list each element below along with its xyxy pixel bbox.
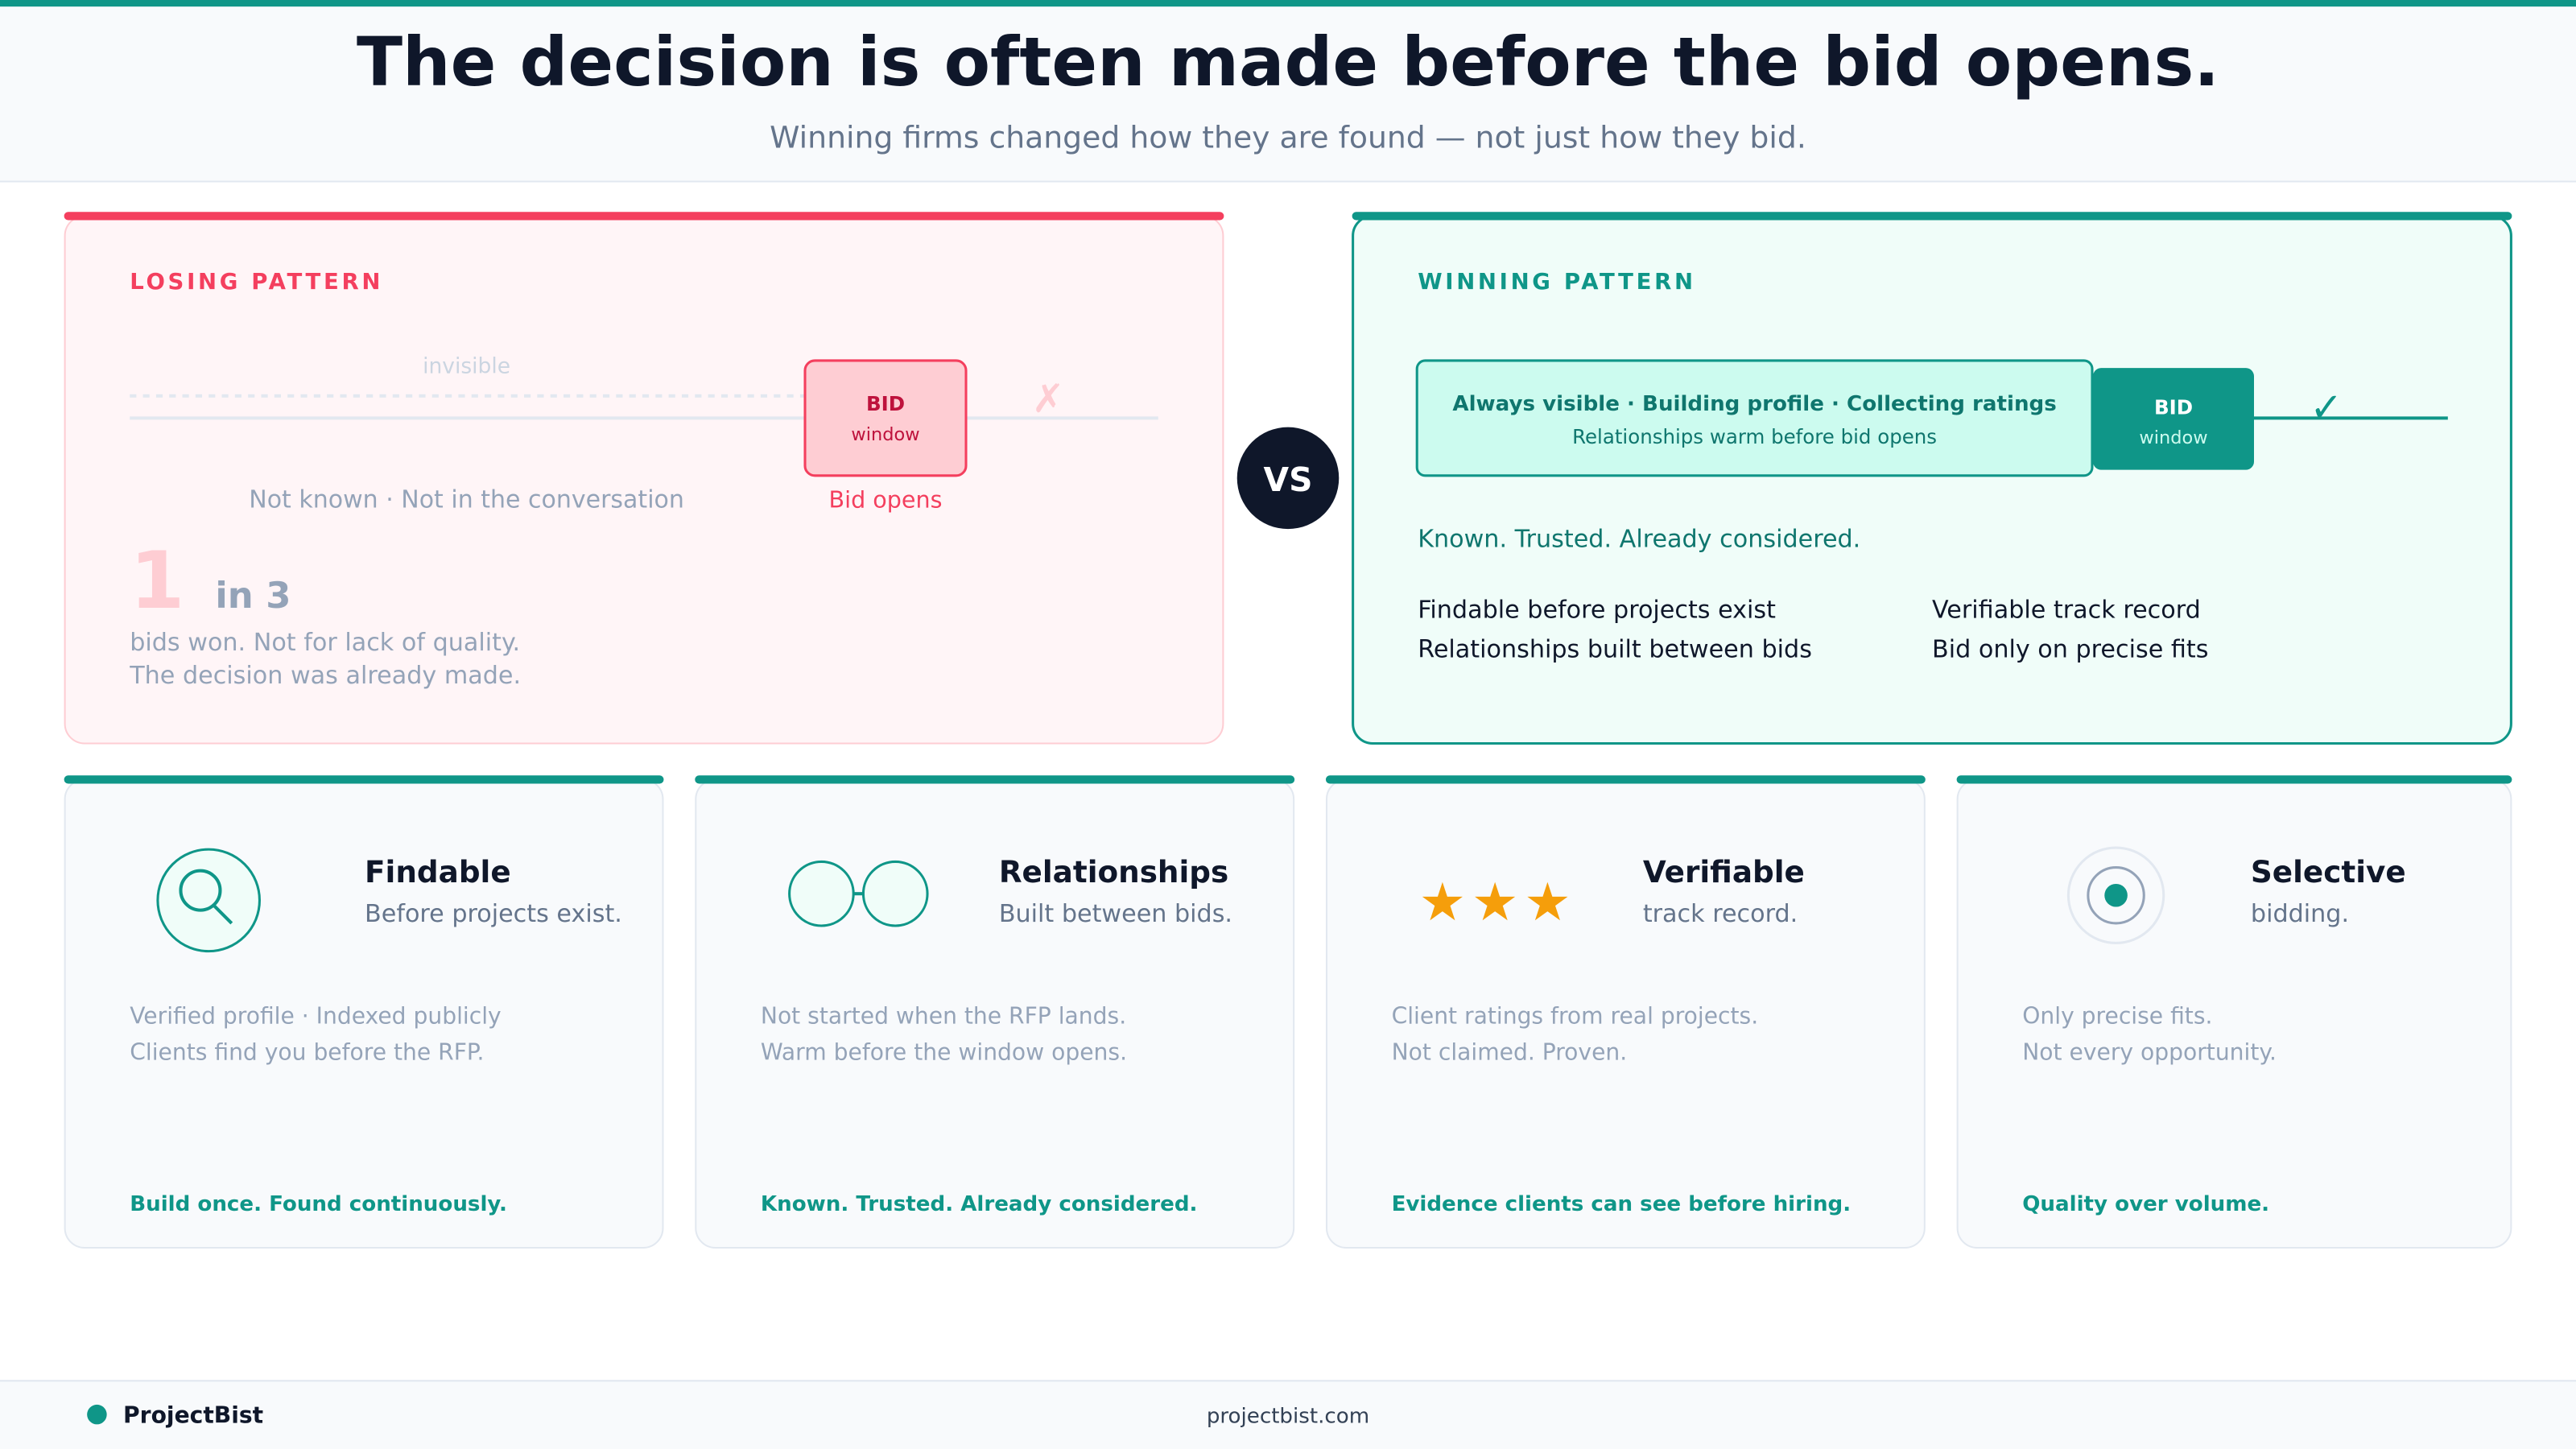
subtitle: Winning firms changed how they are found — not just how they bid. — [770, 120, 1806, 155]
icon: cross: ✗ — [1032, 376, 1065, 422]
visibility box: Relationships warm before bid opens — [1572, 425, 1937, 448]
card: verifiable: track record. — [1643, 900, 1798, 928]
timeline: losing: Not known · Not in the conversation — [249, 486, 684, 514]
card: selective: bidding. — [2251, 900, 2349, 928]
icon: stars: ★ — [1524, 872, 1571, 933]
icon: stars — [1419, 872, 1571, 933]
icon: check: ✓ — [2310, 384, 2343, 430]
bid window box: winning: BID — [2154, 395, 2193, 419]
card: relationships: Relationships — [999, 854, 1228, 890]
list of traits: Verifiable track record — [1932, 596, 2201, 624]
card: verifiable — [1326, 775, 1926, 1248]
icon: stars: ★ — [1419, 872, 1466, 933]
stat: 1 in 3: in 3 — [215, 574, 291, 617]
timeline: losing — [130, 353, 1158, 514]
bid window box: losing: BID — [866, 392, 905, 415]
heading: losing pattern: LOSING PATTERN — [130, 269, 383, 295]
card: verifiable: Verifiable — [1643, 854, 1805, 890]
card: verifiable: Client ratings from real projects. — [1392, 1002, 1758, 1029]
stat: 1 in 3: The decision was already made. — [129, 662, 521, 690]
panel: losing pattern — [64, 212, 1224, 743]
icon: target — [2068, 848, 2164, 943]
card: findable: Findable — [365, 854, 511, 890]
card: selective: Not every opportunity. — [2022, 1038, 2277, 1065]
header — [0, 0, 2576, 182]
card: findable — [64, 775, 663, 1248]
list of traits: Relationships built between bids — [1418, 635, 1812, 663]
card: selective: Quality over volume. — [2022, 1192, 2269, 1216]
card: findable: Before projects exist. — [365, 900, 622, 928]
heading: winning pattern: WINNING PATTERN — [1418, 269, 1696, 295]
card: selective — [1957, 775, 2512, 1248]
vs badge: VS — [1264, 460, 1312, 499]
stat: 1 in 3 — [129, 535, 521, 690]
stat: 1 in 3: bids won. Not for lack of quality. — [130, 629, 520, 657]
stat: 1 in 3: 1 — [130, 535, 184, 627]
bid window box: losing: Bid opens — [829, 486, 942, 514]
card: relationships: Not started when the RFP lands. — [761, 1002, 1126, 1029]
card: findable: Build once. Found continuously. — [130, 1192, 507, 1216]
card: findable: Verified profile · Indexed publicly — [130, 1002, 502, 1029]
card: selective: Selective — [2251, 854, 2406, 890]
bid window box: losing — [805, 361, 966, 514]
icon: magnifier — [158, 849, 259, 952]
card: relationships: Known. Trusted. Already considered. — [761, 1192, 1197, 1216]
footer — [0, 1380, 2576, 1449]
card: relationships: Built between bids. — [999, 900, 1232, 928]
bid window box: winning — [2093, 368, 2254, 470]
icon: stars: ★ — [1472, 872, 1518, 933]
brand logo: ProjectBist — [123, 1402, 263, 1428]
card: selective: Only precise fits. — [2022, 1002, 2212, 1029]
card: verifiable: Not claimed. Proven. — [1392, 1038, 1627, 1065]
visibility box: Always visible · Building profile · Collecting ratings — [1452, 392, 2057, 416]
url: projectbist.com — [1207, 1404, 1369, 1428]
visibility box — [1417, 361, 2092, 476]
list of traits: Bid only on precise fits — [1932, 635, 2208, 663]
card: findable: Clients find you before the RFP. — [130, 1038, 484, 1065]
list of traits — [1418, 596, 2208, 663]
card: relationships: Warm before the window opens. — [761, 1038, 1127, 1065]
icon: linked circles — [790, 861, 927, 926]
bid window box: losing: window — [851, 424, 920, 445]
list of traits: Findable before projects exist — [1418, 596, 1776, 624]
card: relationships — [695, 775, 1294, 1248]
tagline: Known. Trusted. Already considered. — [1418, 526, 1860, 554]
bid window box: winning: window — [2139, 427, 2208, 448]
panel: winning pattern — [1352, 212, 2512, 743]
title: The decision is often made before the bid opens. — [357, 23, 2219, 101]
timeline: losing: invisible — [423, 353, 510, 378]
vs badge — [1237, 427, 1339, 529]
card: verifiable: Evidence clients can see before hiring. — [1392, 1192, 1851, 1216]
